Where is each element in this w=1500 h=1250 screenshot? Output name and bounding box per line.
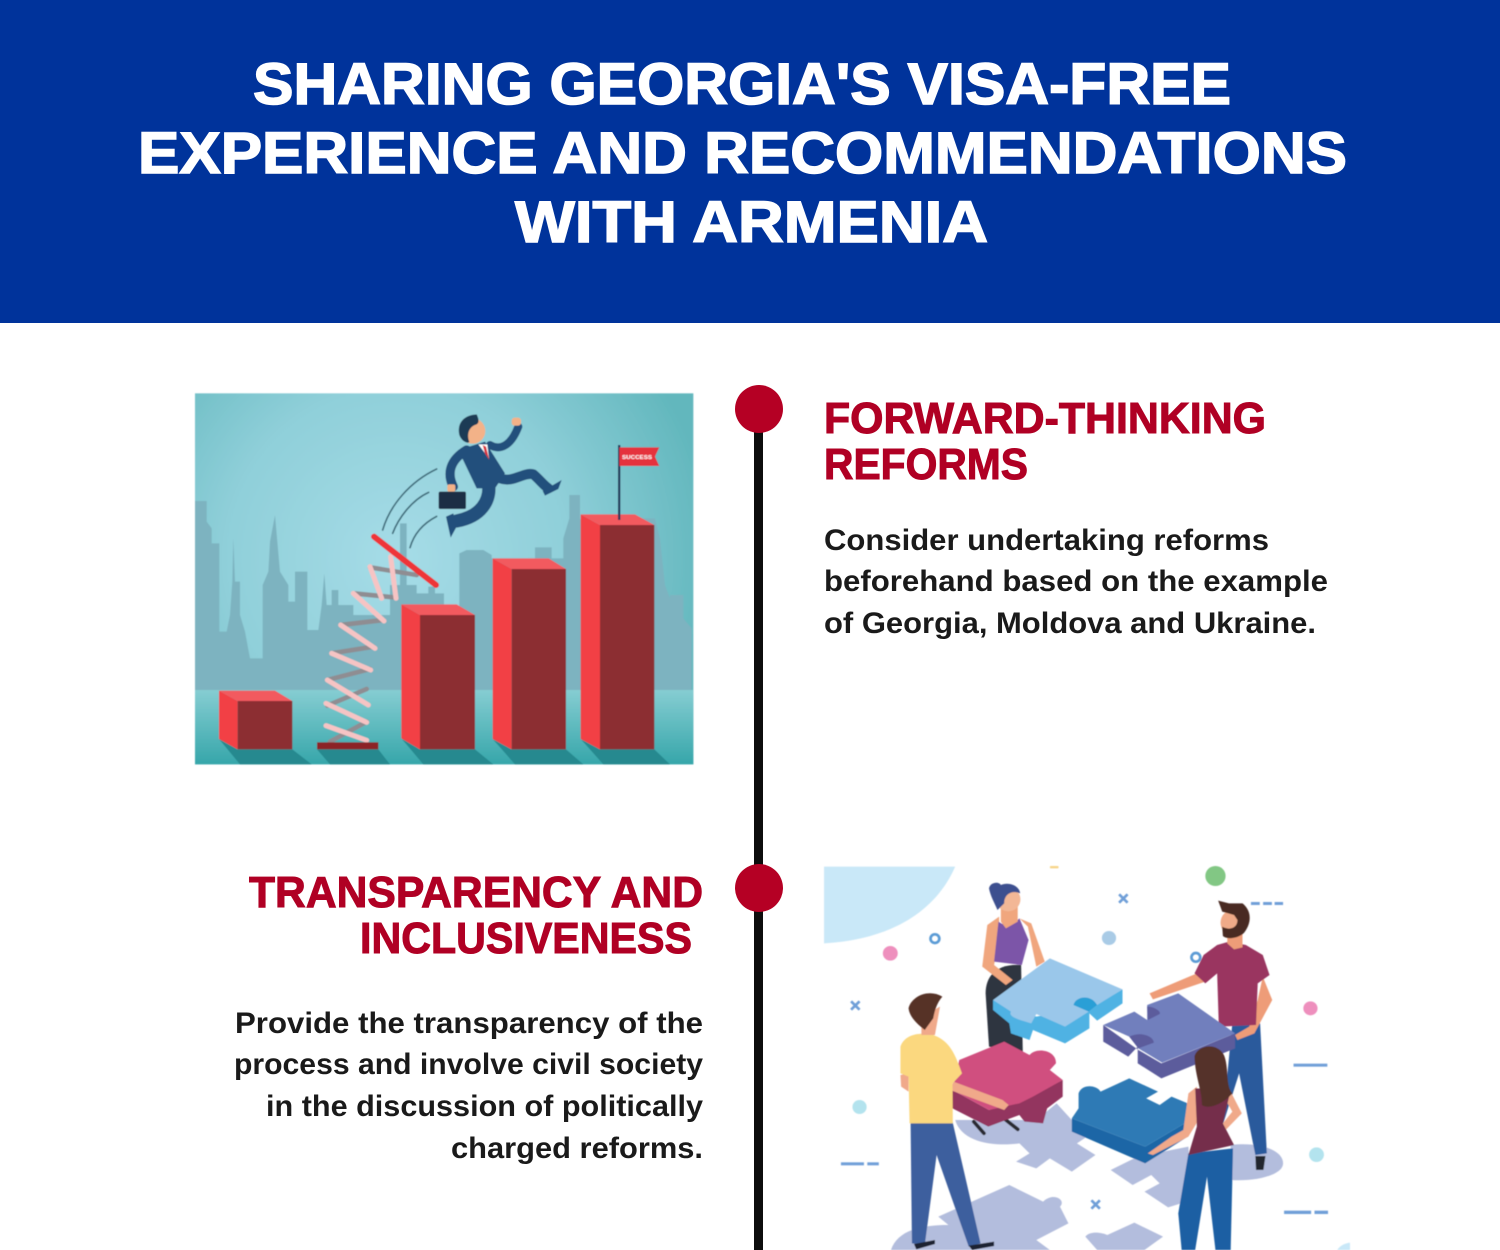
- woman in purple top: [974, 883, 1045, 1133]
- text block: transparency and inclusiveness: in the discussion of politically: [266, 1090, 703, 1123]
- bearded man in maroon shirt: [1150, 901, 1272, 1170]
- bar 4: [581, 514, 654, 749]
- blue puzzle piece: [1072, 1078, 1188, 1163]
- timeline marker 1: [735, 385, 783, 433]
- heading: forward-thinking reforms: FORWARD-THINKING: [824, 394, 1266, 443]
- spring: [317, 537, 436, 749]
- bar 2: [401, 604, 475, 749]
- heading: transparency and inclusiveness: TRANSPARENCY AND: [249, 868, 703, 917]
- illustration: team assembling puzzle: [824, 866, 1350, 1250]
- floor puzzle shadows: [891, 1103, 1283, 1250]
- title: [138, 52, 1347, 255]
- text block: forward-thinking reforms: Consider undertaking reforms: [824, 524, 1269, 557]
- text block: forward-thinking reforms: of Georgia, Moldova and Ukraine.: [824, 607, 1316, 640]
- timeline: [735, 385, 783, 1250]
- flag: [618, 445, 659, 520]
- heading: forward-thinking reforms: REFORMS: [824, 440, 1028, 489]
- heading: transparency and inclusiveness: [249, 868, 703, 963]
- man in yellow shirt: [900, 993, 1009, 1250]
- text block: forward-thinking reforms: beforehand based on the example: [824, 565, 1328, 598]
- bar 1: [219, 691, 292, 749]
- flag: SUCCESS: [622, 455, 652, 461]
- timeline marker 2: [735, 864, 783, 912]
- title: WITH ARMENIA: [515, 190, 988, 255]
- title: EXPERIENCE AND RECOMMENDATIONS: [138, 121, 1347, 186]
- light blue puzzle piece: [993, 958, 1123, 1043]
- pink puzzle piece: [952, 1042, 1063, 1127]
- businessman: [439, 414, 562, 538]
- title: SHARING GEORGIA'S VISA-FREE: [253, 52, 1231, 117]
- woman in maroon top: [1148, 1046, 1242, 1250]
- text block: transparency and inclusiveness: [234, 1007, 703, 1165]
- bar 3: [493, 558, 566, 749]
- illustration: businessman jumping over rising bars: [195, 393, 693, 764]
- text block: transparency and inclusiveness: charged reforms.: [451, 1132, 703, 1165]
- decorative dots and dashes: [841, 866, 1328, 1214]
- bar shadows: [219, 738, 670, 764]
- text block: transparency and inclusiveness: process and involve civil society: [234, 1048, 703, 1081]
- header banner: [0, 0, 1500, 323]
- violet puzzle piece: [1103, 993, 1235, 1078]
- text block: forward-thinking reforms: [824, 524, 1328, 640]
- heading: transparency and inclusiveness: INCLUSIVENESS: [360, 914, 692, 963]
- text block: transparency and inclusiveness: Provide the transparency of the: [235, 1007, 703, 1040]
- heading: forward-thinking reforms: [824, 394, 1266, 489]
- motion lines: [383, 469, 437, 548]
